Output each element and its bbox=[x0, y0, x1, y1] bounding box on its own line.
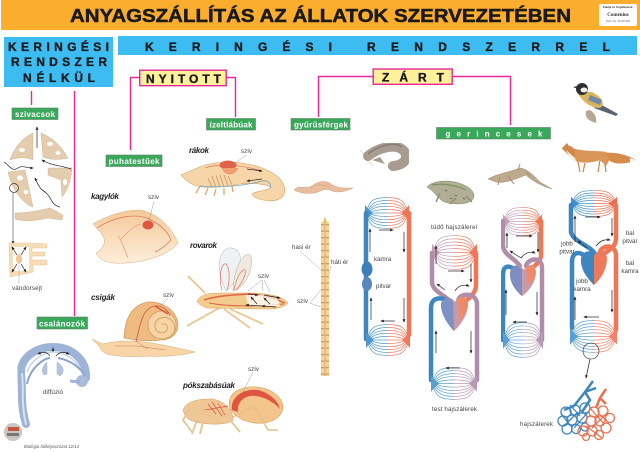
panel: with circulatory system: RENDSZERREL bbox=[367, 40, 610, 54]
connector: open to molluscs and arthropods bbox=[130, 78, 236, 150]
label: right atrium: pitvar bbox=[559, 248, 575, 256]
illustration: spider bbox=[183, 372, 285, 434]
publisher logo bbox=[599, 4, 637, 26]
illustration: salamander bbox=[488, 164, 552, 189]
illustration: sponge section bbox=[4, 127, 72, 244]
label: body capillaries: test hajszálerek bbox=[432, 406, 478, 413]
label: arthropods bbox=[206, 118, 256, 130]
label: cnidarians bbox=[37, 317, 88, 329]
illustration: catfish bbox=[360, 144, 406, 170]
label: right ventricle: kamra bbox=[573, 286, 591, 293]
label: crayfish heart: szív bbox=[241, 148, 253, 155]
illustration: capillary bed bbox=[558, 381, 614, 440]
label: left atrium: pitvar bbox=[622, 238, 638, 245]
panel: with circulatory system: KERINGÉSI bbox=[145, 39, 332, 54]
caption: insects: rovarok bbox=[190, 241, 218, 250]
label: lung capillaries: tüdő hajszálerei bbox=[431, 224, 477, 231]
label: left ventricle: kamra bbox=[621, 268, 639, 275]
label: atrium: pitvar bbox=[376, 283, 391, 290]
caption: wandering cell: vándorsejt bbox=[12, 285, 42, 292]
connector: closed to worms and vertebrates bbox=[318, 76, 510, 125]
label: insect heart: szív bbox=[258, 273, 270, 280]
series caption: Biológia faliképsorozat 12/14 bbox=[24, 444, 80, 449]
heading: closed: ZÁRT bbox=[382, 70, 445, 84]
illustration: bird bbox=[573, 83, 618, 123]
label: left ventricle: bal bbox=[626, 260, 634, 267]
label: right ventricle: jobb bbox=[576, 278, 588, 285]
illustration: frog bbox=[427, 181, 474, 204]
label: worm heart: szív bbox=[297, 298, 309, 305]
caption: arachnids: pókszabásúak bbox=[182, 381, 236, 390]
illustration: jellyfish bbox=[21, 347, 88, 424]
panel: without circulatory system: RENDSZER bbox=[11, 55, 107, 69]
panel: without circulatory system bbox=[4, 37, 113, 87]
illustration: earthworm bbox=[294, 182, 353, 193]
connector: sponges bbox=[30, 91, 32, 105]
label: arthropods: ízeltlábúak bbox=[210, 120, 253, 130]
illustration: mussel bbox=[93, 201, 178, 263]
illustration: annelid circulatory system bbox=[300, 216, 331, 376]
publisher logo: Pécs, Tel.: 34 067 000 bbox=[606, 20, 630, 23]
caption: crayfish: rákok bbox=[189, 146, 210, 155]
panel: with circulatory system bbox=[118, 36, 637, 55]
panel: without circulatory system: NÉLKÜL bbox=[23, 70, 95, 85]
label: sponges: szivacsok bbox=[15, 110, 56, 119]
label: ventricle: kamra bbox=[374, 256, 392, 263]
illustration: insect bbox=[187, 248, 288, 328]
publisher logo: Comenius bbox=[607, 13, 629, 18]
label: cnidarians: csalánozók bbox=[39, 320, 86, 328]
caption: snails: csigák bbox=[91, 293, 116, 302]
diagram: amphibian circulation bbox=[431, 236, 477, 399]
diagram: reptile circulation bbox=[503, 208, 543, 357]
caption: diffusion: diffúzió bbox=[43, 389, 64, 396]
title banner bbox=[1, 0, 640, 30]
label: capillaries: hajszálerek bbox=[520, 421, 554, 428]
caption: mussels: kagylók bbox=[91, 192, 120, 201]
diagram: bird and mammal circulation bbox=[570, 191, 617, 378]
label: dorsal vessel: háti ér bbox=[331, 259, 348, 266]
label: sponges bbox=[12, 108, 58, 120]
illustration: crayfish bbox=[181, 155, 285, 201]
heading: open: NYITOTT bbox=[146, 72, 222, 86]
series logo bbox=[4, 423, 22, 441]
label: vertebrates bbox=[436, 128, 550, 139]
label: snail heart: szív bbox=[163, 292, 175, 299]
diagram: fish circulation bbox=[362, 198, 410, 355]
panel: without circulatory system: KERINGÉSI bbox=[8, 39, 109, 54]
label: mussel heart: szív bbox=[148, 194, 160, 201]
illustration: snail bbox=[92, 298, 195, 357]
illustration: sponge cell detail bbox=[9, 243, 47, 283]
connector: cnidarians bbox=[74, 91, 76, 316]
label: annelids: gyűrűsférgek bbox=[294, 120, 349, 130]
label: right atrium: jobb bbox=[561, 240, 573, 248]
label: molluscs: puhatestűek bbox=[108, 157, 160, 166]
label: spider heart: szív bbox=[248, 366, 260, 373]
label: left atrium: bal bbox=[626, 230, 634, 237]
publisher logo: Kiadja és forgalmazza: bbox=[603, 5, 633, 9]
title banner: ANYAGSZÁLLÍTÁS AZ ÁLLATOK SZERVEZETÉBEN bbox=[70, 5, 571, 26]
illustration: fox bbox=[562, 143, 636, 172]
label: vertebrates: gerincesek bbox=[446, 130, 543, 138]
label: ventral vessel: hasi ér bbox=[292, 244, 311, 251]
